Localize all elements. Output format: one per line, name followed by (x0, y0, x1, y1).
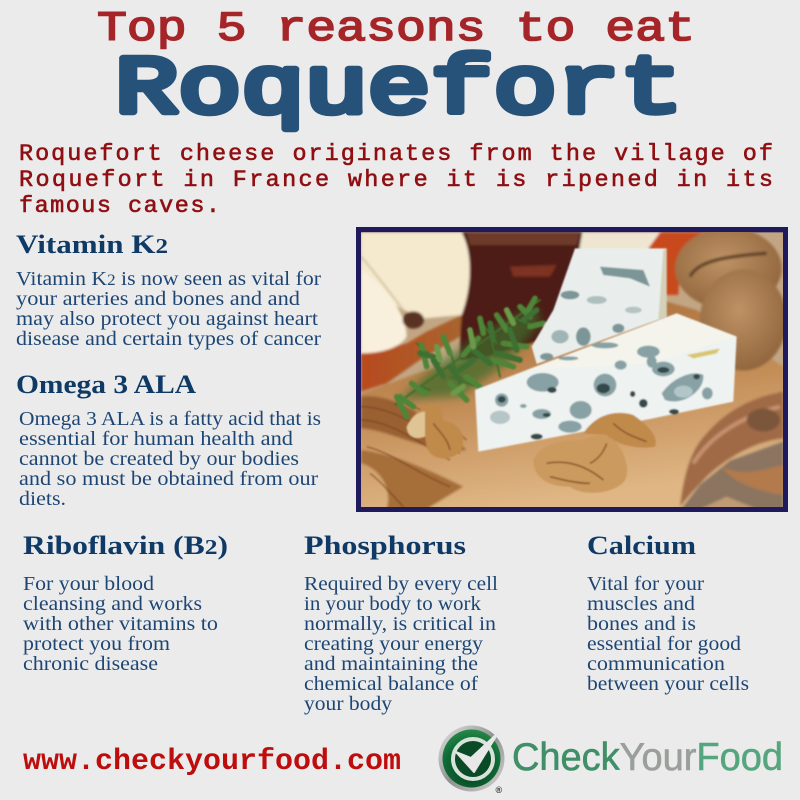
text block: Phosphorus (304, 573, 498, 715)
text block: Omega 3 ALA: and so must be obtained from our (19, 468, 318, 490)
column: Riboflavin (23, 531, 228, 675)
logo wordmark: CheckYourFood (512, 736, 783, 779)
text block: Riboflavin: with other vitamins to (23, 613, 218, 635)
registered mark: ® (496, 785, 502, 795)
heading: Phosphorus: Phosphorus (304, 531, 466, 560)
text block: Vitamin K2: your arteries and bones and and (16, 288, 300, 310)
website url: www.checkyourfood.com (23, 745, 401, 779)
text block: Omega 3 ALA: cannot be created by our bodies (19, 448, 299, 470)
intro text (19, 141, 773, 220)
text block: Calcium: communication (587, 653, 725, 675)
photo: blue cheese on wooden board (356, 227, 788, 512)
intro text: Roquefort cheese originates from the village of (19, 141, 773, 168)
text block: Vitamin K2: disease and certain types of cancer (16, 328, 321, 350)
walnut halves (407, 404, 656, 493)
text block: Phosphorus: in your body to work (304, 593, 482, 615)
back cheese wedge (532, 248, 667, 364)
text block: Omega 3 ALA: essential for human health and (19, 428, 293, 450)
text block: Phosphorus: your body (304, 693, 393, 715)
text block: Phosphorus: and maintaining the (304, 653, 478, 675)
title: Roquefort: Roquefort (115, 44, 683, 137)
text block: Riboflavin: For your blood (23, 573, 154, 595)
text block: Calcium: between your cells (587, 673, 749, 695)
board grain lines (361, 400, 467, 507)
icon: check badge (438, 726, 504, 792)
heading: Vitamin K2: Vitamin K 2 (16, 230, 168, 259)
column: Phosphorus (304, 531, 498, 715)
text block: Phosphorus: Required by every cell (304, 573, 498, 595)
text block: Riboflavin: chronic disease (23, 653, 158, 675)
title: Top 5 reasons to eat: Top 5 reasons to eat (97, 5, 695, 53)
column: Calcium (587, 531, 749, 695)
text block: Phosphorus: creating your energy (304, 633, 484, 655)
front cheese wedge (474, 336, 738, 452)
thyme foliage base (400, 307, 540, 400)
intro text: Roquefort in France where it is ripened in its (19, 167, 773, 194)
thyme sprig (395, 298, 543, 417)
text block: Calcium: muscles and (587, 593, 695, 615)
intro text: famous caves. (19, 193, 220, 220)
text block: Riboflavin (23, 573, 218, 675)
text block: Omega 3 ALA: diets. (19, 488, 66, 510)
heading: Riboflavin (B2): Riboflavin (B 2) (23, 531, 228, 560)
heading: Calcium: Calcium (587, 531, 696, 560)
text block: Vitamin K2: may also protect you against heart (16, 308, 318, 330)
text block: Riboflavin: protect you from (23, 633, 170, 655)
text block: Phosphorus: chemical balance of (304, 673, 478, 695)
text block: Riboflavin: cleansing and works (23, 593, 202, 615)
logo: CheckYourFood (438, 726, 783, 795)
text block: Omega 3 ALA: Omega 3 ALA is a fatty acid that is (19, 408, 321, 430)
text block: Calcium: bones and is (587, 613, 696, 635)
text block: Calcium (587, 573, 749, 695)
text block: Phosphorus: normally, is critical in (304, 613, 496, 635)
text block: Calcium: Vital for your (587, 573, 704, 595)
text block: Omega 3 ALA (19, 408, 321, 510)
text block: Vitamin K2 (16, 268, 321, 350)
text block: Calcium: essential for good (587, 633, 741, 655)
heading: Omega 3 ALA: Omega 3 ALA (16, 370, 196, 399)
text block: Vitamin K2: Vitamin K 2 is now seen as vital for (16, 268, 321, 290)
